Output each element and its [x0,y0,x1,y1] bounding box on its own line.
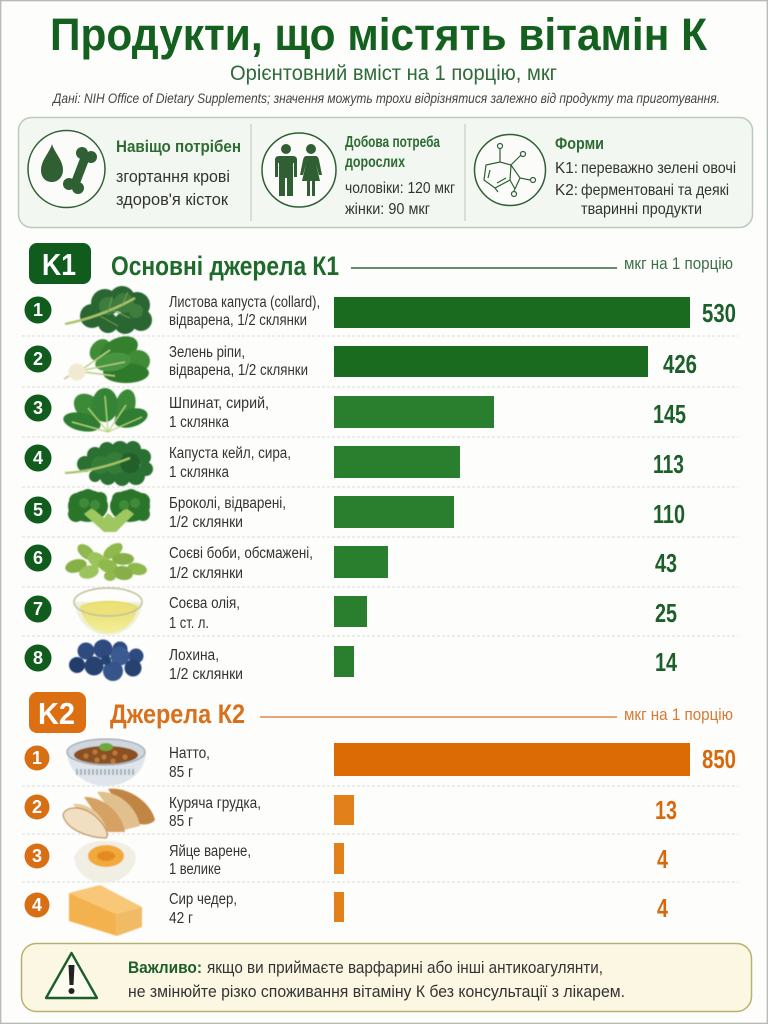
row: soybean oil 25: 25 [655,598,677,628]
text: forms: ферментовані та деякі [581,182,729,199]
text: daily need: Добова потреба [345,134,440,151]
row: soybeans 43: 43 [655,548,677,578]
section header: K2: Джерела К2 [110,699,245,729]
row: boiled egg 4: 1 велике [169,861,221,878]
row: natto 850: Натто, [169,745,210,762]
row: chicken breast 13 [24,789,677,838]
text: forms: переважно зелені овочі [581,160,736,177]
row: collard 530: відварена, 1/2 склянки [169,312,307,329]
row: cheddar 4: Сир чедер, [169,891,237,908]
row: soybean oil 25 [24,588,677,635]
icon: blood drop and bone [28,130,105,208]
icon: bowl of oil [74,588,142,635]
row: natto 850 [24,739,736,786]
row: natto 850: 850 [702,744,736,774]
text: why needed: Навіщо потрібен [116,138,241,156]
row: soybeans 43: 1/2 склянки [169,565,243,582]
icon: boiled egg [74,841,136,883]
row: chicken breast 13: 85 г [169,813,193,830]
row: collard 530: Листова капуста (collard), [169,294,320,311]
row: turnip greens 426: 426 [663,349,697,379]
title: Продукти, що містять вітамін К [50,9,708,60]
row: kale 113 [24,441,684,486]
row: soybean oil 25: Соєва олія, [169,595,240,612]
text: why needed: здоров'я кісток [116,190,229,209]
row: turnip greens 426: Зелень ріпи, [169,344,245,361]
section header: K1: K1 [42,247,76,282]
row: chicken breast 13: Куряча грудка, [169,795,261,812]
text: forms: K2: [555,182,578,199]
row: spinach 145: 1 склянка [169,414,229,431]
row: collard 530: 530 [702,298,736,328]
row: turnip greens 426: 2 [33,349,43,369]
section header: K1: мкг на 1 порцію [624,255,733,273]
row: boiled egg 4: 3 [32,846,42,866]
row: collard 530 [24,286,736,334]
icon: molecule [474,134,546,206]
row: cheddar 4 [24,885,668,936]
icon: blueberries [69,640,144,681]
row: boiled egg 4 [24,841,668,883]
row: natto 850: 85 г [169,764,193,781]
row: kale 113: 113 [653,449,684,479]
section header: K1 [29,243,733,284]
text: forms: Форми [555,135,604,153]
row: broccoli 110: Броколі, відварені, [169,495,286,512]
row: spinach 145: 3 [33,398,43,418]
row: spinach 145: Шпинат, сирий, [169,395,269,412]
row: broccoli 110 [24,489,685,532]
icon: broccoli [68,489,150,532]
row: spinach 145: 145 [653,399,686,429]
row: turnip greens 426 [24,331,697,383]
text: why needed [116,138,241,209]
section header: K2: K2 [38,696,75,731]
row: kale 113: 1 склянка [169,464,229,481]
callout: warning [22,944,752,1012]
row: soybeans 43 [24,540,677,582]
row: broccoli 110: 1/2 склянки [169,514,243,531]
row: soybeans 43: 6 [33,548,43,568]
row: broccoli 110: 110 [653,499,685,529]
text: forms [555,135,736,218]
warning text [128,958,625,1001]
row: cheddar 4: 42 г [169,910,193,927]
section header: K1: Основні джерела К1 [111,251,339,281]
text: forms: K1: [555,160,578,177]
subtitle: Орієнтовний вміст на 1 порцію, мкг [230,62,557,85]
row: soybeans 43: Соєві боби, обсмажені, [169,545,313,562]
row: kale 113: Капуста кейл, сира, [169,445,291,462]
icon: collard greens [65,286,152,334]
text: daily need [345,134,455,218]
row: cheddar 4: 4 [657,893,668,923]
icon: spinach [62,387,150,435]
icon: turnip greens [64,331,150,383]
row: collard 530: 1 [33,300,43,320]
section header: K2 [29,692,733,733]
icon: warning triangle [46,953,97,998]
icon: natto bowl [67,739,146,786]
icon: man and woman [262,133,336,207]
icon: cheese block [69,885,142,936]
row: blueberries 14: Лохина, [169,647,219,664]
icon: kale [65,441,153,486]
row: chicken breast 13: 2 [32,797,42,817]
row: soybean oil 25: 1 ст. л. [169,615,209,632]
warning text: якщо ви приймаєте варфарині або інші антикоагулянти, [207,958,603,977]
warning text: Важливо: [128,958,202,977]
row: blueberries 14: 1/2 склянки [169,666,243,683]
row: chicken breast 13: 13 [655,795,677,825]
text: daily need: жінки: 90 мкг [345,201,430,218]
row: natto 850: 1 [32,748,42,768]
row: soybean oil 25: 7 [33,599,43,619]
row: blueberries 14: 8 [33,648,43,668]
text: forms: тваринні продукти [581,201,702,218]
row: boiled egg 4: 4 [657,844,668,874]
row: turnip greens 426: відварена, 1/2 склянки [169,362,308,379]
text: daily need: дорослих [345,154,405,171]
row: boiled egg 4: Яйце варене, [169,843,251,860]
warning text: не змінюйте різко споживання вітаміну К без консультації з лікарем. [128,982,625,1001]
text: daily need: чоловіки: 120 мкг [345,180,455,197]
text: why needed: згортання крові [116,167,230,186]
row: broccoli 110: 5 [33,500,43,520]
row: cheddar 4: 4 [32,895,42,915]
panel: key facts [18,118,752,228]
row: blueberries 14 [24,640,677,683]
row: kale 113: 4 [33,448,43,468]
section header: K2: мкг на 1 порцію [624,706,733,724]
row: blueberries 14: 14 [655,647,677,677]
icon: soybeans [64,540,148,582]
icon: sliced chicken [63,789,155,838]
row: spinach 145 [24,387,686,435]
